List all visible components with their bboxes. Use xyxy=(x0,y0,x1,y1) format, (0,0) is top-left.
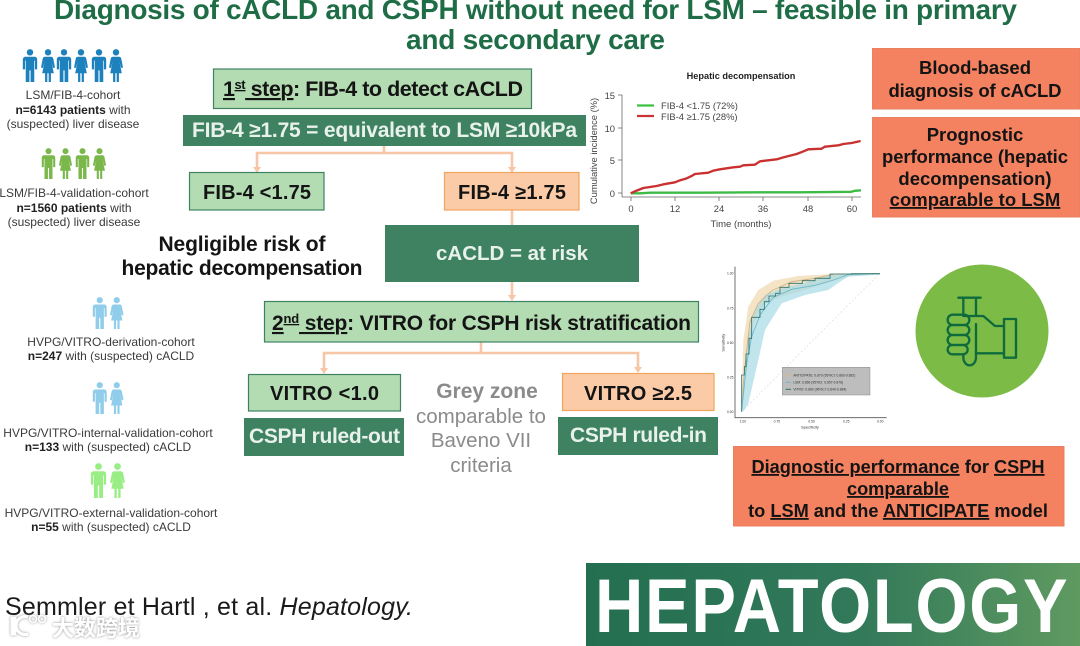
chart: hepatic decompensation cumulative incidence: Cumulative incidence (%) xyxy=(588,98,599,204)
chart: hepatic decompensation cumulative incidence: 60 xyxy=(847,203,857,214)
panel: diagnostic performance: comparable xyxy=(847,479,949,499)
cohort: LSM/FIB-4: LSM/FIB-4-cohort xyxy=(26,88,121,102)
chart: hepatic decompensation cumulative incidence xyxy=(588,71,861,230)
text: negligible risk xyxy=(122,233,362,280)
step 2 box xyxy=(264,302,698,342)
chart: ROC curves: 1.00 xyxy=(740,420,746,424)
panel: prognostic performance xyxy=(872,118,1080,217)
citation: Semmler et Hartl , et al. Hepatology. xyxy=(5,593,413,621)
box: FIB-4 at least 1.75 xyxy=(444,172,579,210)
watermark: 大数跨境 xyxy=(52,616,140,641)
text: grey zone: criteria xyxy=(450,454,512,477)
chart: hepatic decompensation cumulative incidence: 36 xyxy=(758,203,768,214)
chart: hepatic decompensation cumulative incidence: 5 xyxy=(610,155,615,166)
chart: ROC curves: 0.50 xyxy=(727,341,734,345)
step 2 box: nd xyxy=(284,311,299,326)
chart: ROC curves xyxy=(721,267,887,429)
cohort: HVPG/VITRO derivation: HVPG/VITRO-derivation-cohort xyxy=(27,335,195,349)
text: negligible risk: hepatic decompensation xyxy=(122,257,362,280)
cohort: HVPG/VITRO external validation: HVPG/VITRO-external-validation-cohort xyxy=(5,506,218,520)
chart: ROC curves: 0.75 xyxy=(774,420,780,424)
cohort: LSM/FIB-4: n=6143 patients with xyxy=(15,103,131,117)
FIB-4 threshold box: FIB-4 ≥1.75 = equivalent to LSM ≥10kPa xyxy=(192,119,577,142)
panel: blood-based diagnosis xyxy=(872,48,1080,109)
cohort: HVPG/VITRO derivation xyxy=(27,297,195,363)
step 2 box: : VITRO for CSPH risk stratification xyxy=(347,312,691,335)
panel: prognostic performance: Prognostic xyxy=(927,124,1023,145)
chart: ROC curves: ANTICIPATE: 0.870 (95%CI: 0.860-0.882) xyxy=(793,373,855,377)
step 2 box: 2 xyxy=(272,311,347,335)
box: FIB-4 below 1.75 xyxy=(190,172,324,210)
chart: hepatic decompensation cumulative incidence: Hepatic decompensation xyxy=(687,71,796,81)
box: VITRO at least 2.5: VITRO ≥2.5 xyxy=(584,383,692,405)
chart: ROC curves: 0.00 xyxy=(877,420,884,424)
panel: diagnostic performance xyxy=(734,446,1064,526)
chart: ROC curves: VITRO: 0.860 (95%CI: 0.840-0.884) xyxy=(793,388,846,392)
text: grey zone: Baveno VII xyxy=(431,429,531,452)
box: FIB-4 at least 1.75: FIB-4 ≥1.75 xyxy=(458,182,566,204)
cohort: LSM/FIB-4 validation xyxy=(0,148,149,229)
chart: ROC curves: Sensitivity xyxy=(721,334,726,352)
chart: hepatic decompensation cumulative incidence: 24 xyxy=(714,203,724,214)
chart: hepatic decompensation cumulative incidence: 10 xyxy=(605,123,615,134)
panel: blood-based diagnosis: Blood-based xyxy=(919,57,1031,78)
box: VITRO below 1.0: VITRO <1.0 xyxy=(270,383,379,405)
cohort: HVPG/VITRO external validation: n=55 with (suspected) cACLD xyxy=(31,520,191,534)
panel: diagnostic performance: to LSM and the ANTICIPATE model xyxy=(748,501,1048,521)
chart: ROC curves: LSM: 0.866 (95%CI: 0.857-0.878) xyxy=(793,381,843,385)
text: grey zone xyxy=(416,380,546,477)
cohort: HVPG/VITRO derivation: n=247 with (suspected) cACLD xyxy=(28,349,195,363)
title: and secondary care xyxy=(406,24,665,55)
step 1 box: step xyxy=(245,77,293,101)
cohort: LSM/FIB-4: (suspected) liver disease xyxy=(7,117,140,131)
cohort: HVPG/VITRO external validation xyxy=(5,463,218,534)
box: VITRO below 1.0 xyxy=(248,374,400,411)
cohort: HVPG/VITRO internal validation: n=133 with (suspected) cACLD xyxy=(25,440,192,454)
panel: study cohorts xyxy=(0,49,218,534)
box: cACLD at risk: cACLD = at risk xyxy=(436,242,589,265)
step 1 box xyxy=(214,69,532,108)
step 1 box: : FIB-4 to detect cACLD xyxy=(293,77,523,101)
cohort: LSM/FIB-4 validation: LSM/FIB-4-validation-cohort xyxy=(0,186,149,200)
chart: ROC curves: 0.25 xyxy=(727,376,734,380)
box: CSPH ruled-in: CSPH ruled-in xyxy=(570,424,707,447)
box: CSPH ruled-out xyxy=(244,418,404,456)
chart: hepatic decompensation cumulative incidence: 0 xyxy=(628,203,634,214)
panel: prognostic performance: performance (hepatic xyxy=(882,146,1068,167)
chart: ROC curves: 0.00 xyxy=(727,410,734,414)
chart: ROC curves: 1.00 xyxy=(727,271,734,275)
step 1 box: 1 xyxy=(223,77,293,101)
chart: hepatic decompensation cumulative incidence: 15 xyxy=(605,90,615,101)
box: cACLD at risk xyxy=(385,225,639,282)
chart: ROC curves: Specificity xyxy=(801,424,819,429)
box: CSPH ruled-in xyxy=(558,417,718,455)
box: VITRO at least 2.5 xyxy=(562,374,714,410)
title xyxy=(54,0,1017,55)
box: FIB-4 below 1.75: FIB-4 <1.75 xyxy=(203,182,311,204)
chart: ROC curves: 0.25 xyxy=(843,420,850,424)
chart: hepatic decompensation cumulative incidence: 0 xyxy=(610,188,615,199)
chart: ROC curves: 0.75 xyxy=(727,306,734,310)
text: negligible risk: Negligible risk of xyxy=(158,233,326,256)
icon: hand holding test tube xyxy=(916,264,1048,398)
panel: diagnostic performance: Diagnostic performance for CSPH xyxy=(751,457,1045,477)
cohort: LSM/FIB-4 validation: (suspected) liver disease xyxy=(8,215,141,229)
flowchart connectors xyxy=(253,146,642,374)
chart: hepatic decompensation cumulative incidence: 12 xyxy=(670,203,680,214)
cohort: LSM/FIB-4 xyxy=(7,49,140,131)
cohort: HVPG/VITRO internal validation xyxy=(3,382,213,454)
chart: hepatic decompensation cumulative incidence: 48 xyxy=(803,203,813,214)
cohort: HVPG/VITRO internal validation: HVPG/VITRO-internal-validation-cohort xyxy=(3,426,213,440)
chart: hepatic decompensation cumulative incidence: FIB-4 <1.75 (72%) xyxy=(661,100,738,111)
text: grey zone: comparable to xyxy=(416,405,546,428)
box: CSPH ruled-out: CSPH ruled-out xyxy=(249,425,400,448)
text: grey zone: Grey zone xyxy=(436,380,538,403)
chart: hepatic decompensation cumulative incidence: Time (months) xyxy=(711,219,771,230)
chart: ROC curves: 0.50 xyxy=(808,420,815,424)
cohort: LSM/FIB-4 validation: n=1560 patients with xyxy=(16,201,132,215)
step 2 box: step xyxy=(299,312,347,335)
panel: blood-based diagnosis: diagnosis of cACLD xyxy=(888,80,1062,101)
panel: prognostic performance: comparable to LSM xyxy=(890,189,1060,210)
chart: hepatic decompensation cumulative incidence: FIB-4 ≥1.75 (28%) xyxy=(661,111,738,122)
watermark xyxy=(12,616,140,641)
panel: prognostic performance: decompensation) xyxy=(898,168,1052,189)
step 1 box: st xyxy=(234,77,246,92)
